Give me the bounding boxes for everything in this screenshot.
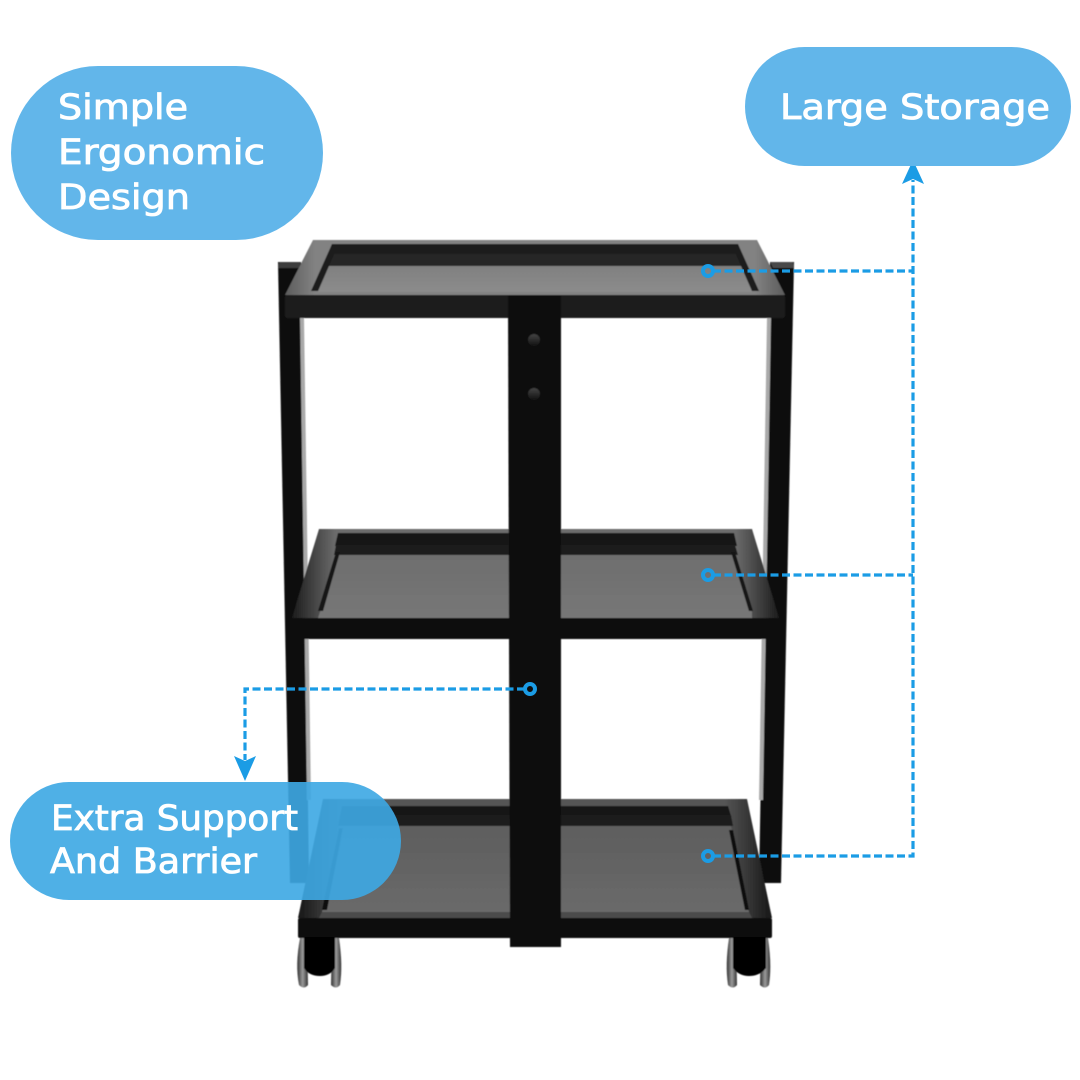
right caster (727, 937, 770, 988)
middle shelf (292, 529, 779, 639)
callout: Simple Ergonomic Design (11, 66, 323, 240)
callout: Large Storage: Large Storage (780, 88, 1050, 128)
center post (508, 295, 561, 947)
callout: Extra Support And Barrier: And Barrier (50, 842, 258, 882)
callout: Simple Ergonomic Design: Design (58, 178, 190, 218)
callout: Simple Ergonomic Design: Ergonomic (58, 133, 265, 173)
support callout connector line (245, 684, 535, 760)
storage callout connector lines (703, 180, 913, 861)
callout: Large Storage (745, 47, 1071, 166)
cart product illustration (278, 240, 794, 988)
left caster (297, 937, 341, 988)
post bolts (528, 334, 540, 400)
rear right post (759, 262, 794, 883)
rear left post (278, 262, 311, 883)
arrow: down to Extra Support (234, 756, 256, 781)
top shelf (285, 240, 785, 318)
callout: Simple Ergonomic Design: Simple (58, 88, 188, 128)
callout: Extra Support And Barrier (10, 782, 401, 900)
bottom shelf (298, 799, 772, 938)
callout: Extra Support And Barrier: Extra Support (51, 799, 298, 839)
arrow: up to Large Storage (902, 160, 924, 184)
